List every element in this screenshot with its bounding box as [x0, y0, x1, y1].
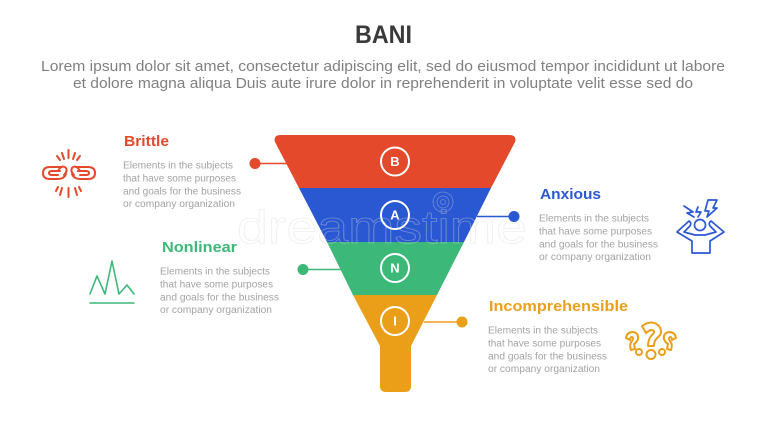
connector: Incomprehensible: [424, 316, 468, 328]
panel: Brittle: [123, 134, 241, 210]
text block: Nonlinear: [160, 266, 279, 316]
text block: Nonlinear: or company organization: [160, 305, 272, 316]
text block: Anxious: and goals for the business: [539, 240, 658, 250]
text block: Anxious: Elements in the subjects: [539, 214, 649, 224]
funnel segment: B red: [275, 135, 515, 188]
watermark: dreamstime: [237, 201, 527, 253]
letter badge I: I: [393, 314, 397, 328]
heading: Anxious: Anxious: [540, 187, 601, 203]
panel: Anxious: [539, 187, 658, 263]
connector: Anxious: [477, 211, 520, 222]
heading: Incomprehensible: Incomprehensible: [489, 299, 628, 315]
letter badge N: N: [390, 260, 400, 276]
text block: Incomprehensible: that have some purposes: [488, 338, 601, 350]
icon: anxious person: [677, 200, 724, 253]
text block: Incomprehensible: [488, 326, 607, 375]
heading: Brittle: Brittle: [124, 134, 169, 150]
text block: Anxious: or company organization: [539, 252, 651, 263]
connector: Brittle: [250, 158, 287, 169]
funnel segment: N green: [327, 242, 464, 295]
icon: nonlinear line chart: [90, 261, 134, 303]
icon: question marks: [626, 322, 676, 359]
letter badge N: [381, 254, 409, 282]
subtitle: et dolore magna aliqua Duis aute irure dolor in reprehenderit in voluptate velit esse sed do: [73, 76, 693, 92]
heading: Nonlinear: Nonlinear: [162, 240, 237, 256]
text block: Brittle: that have some purposes: [123, 174, 236, 184]
panel: Nonlinear: [160, 240, 279, 316]
letter badge A: [381, 201, 409, 229]
text block: Nonlinear: Elements in the subjects: [160, 266, 270, 278]
text block: Anxious: that have some purposes: [539, 226, 652, 238]
icon: broken chain: [43, 150, 95, 197]
text block: Nonlinear: that have some purposes: [160, 280, 273, 290]
letter badge I: [381, 307, 409, 335]
funnel segment: A blue: [299, 188, 491, 242]
text block: Brittle: or company organization: [123, 199, 235, 210]
text block: Brittle: [123, 160, 241, 210]
text block: Incomprehensible: Elements in the subjects: [488, 326, 598, 336]
letter badge B: [381, 148, 409, 176]
letter badge B: B: [390, 154, 400, 169]
text block: Brittle: Elements in the subjects: [123, 160, 233, 172]
panel: Incomprehensible: [488, 299, 628, 375]
funnel: [275, 135, 515, 392]
text block: Anxious: [539, 214, 658, 263]
text block: Incomprehensible: or company organization: [488, 364, 600, 375]
subtitle: Lorem ipsum dolor sit amet, consectetur adipiscing elit, sed do eiusmod tempor incididunt ut labore: [41, 59, 725, 75]
text block: Nonlinear: and goals for the business: [160, 292, 279, 304]
letter badge A: A: [390, 208, 400, 222]
title: BANI: [355, 21, 412, 49]
text block: Brittle: and goals for the business: [123, 186, 241, 198]
subtitle: [41, 59, 725, 92]
funnel segment: I orange with neck: [353, 295, 437, 392]
connector: Nonlinear: [298, 264, 341, 275]
text block: Incomprehensible: and goals for the business: [488, 352, 607, 362]
